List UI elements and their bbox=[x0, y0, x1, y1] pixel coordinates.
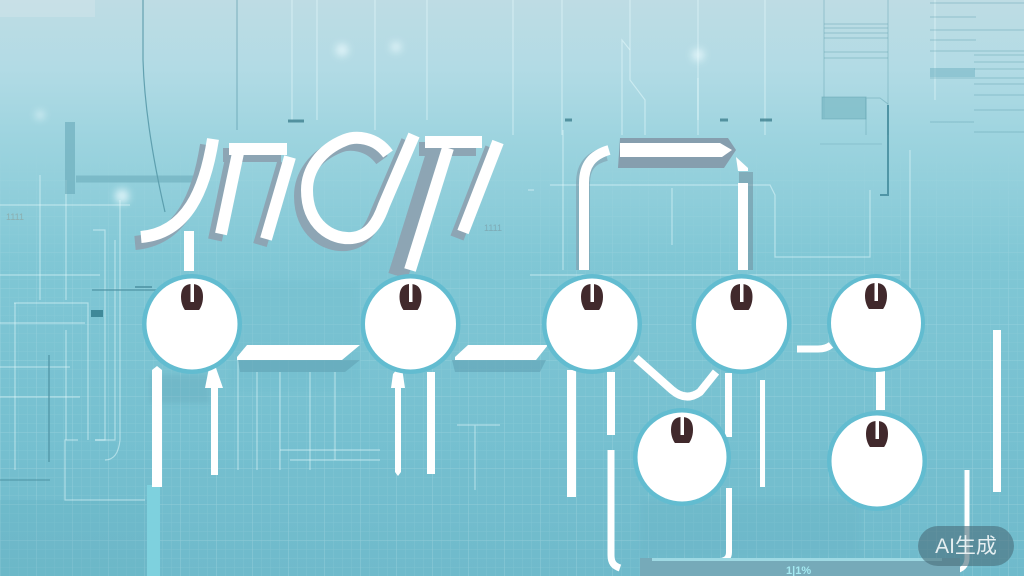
node 5 bbox=[827, 274, 925, 372]
watermark badge bbox=[918, 526, 1014, 566]
vertical legs below nodes bbox=[147, 330, 1001, 576]
node 6 bbox=[633, 408, 731, 506]
title shadow bbox=[135, 141, 492, 276]
watermark badge: AI生成 bbox=[935, 535, 997, 558]
V-shaped connector bbox=[636, 358, 716, 397]
node 3 bbox=[542, 274, 642, 374]
top frame connector bbox=[583, 138, 748, 270]
horizontal connectors bbox=[237, 345, 831, 372]
node 1 bbox=[142, 274, 242, 374]
title white strokes bbox=[141, 135, 498, 270]
title: stylised neon lettering bbox=[135, 135, 498, 276]
bottom bar bbox=[640, 558, 960, 576]
node 4 bbox=[692, 274, 792, 374]
side labels: 1111 bbox=[6, 212, 24, 222]
node 7 bbox=[827, 411, 927, 511]
circuit trace background lines bbox=[0, 0, 935, 500]
side labels bbox=[6, 212, 502, 233]
soft glow lights bbox=[36, 42, 704, 203]
upper right data panel bbox=[820, 0, 1024, 195]
connector: title to first node bbox=[184, 231, 194, 271]
side labels: 1111 bbox=[484, 223, 502, 233]
dark trace accents bbox=[0, 0, 772, 480]
node 2 bbox=[360, 274, 460, 374]
